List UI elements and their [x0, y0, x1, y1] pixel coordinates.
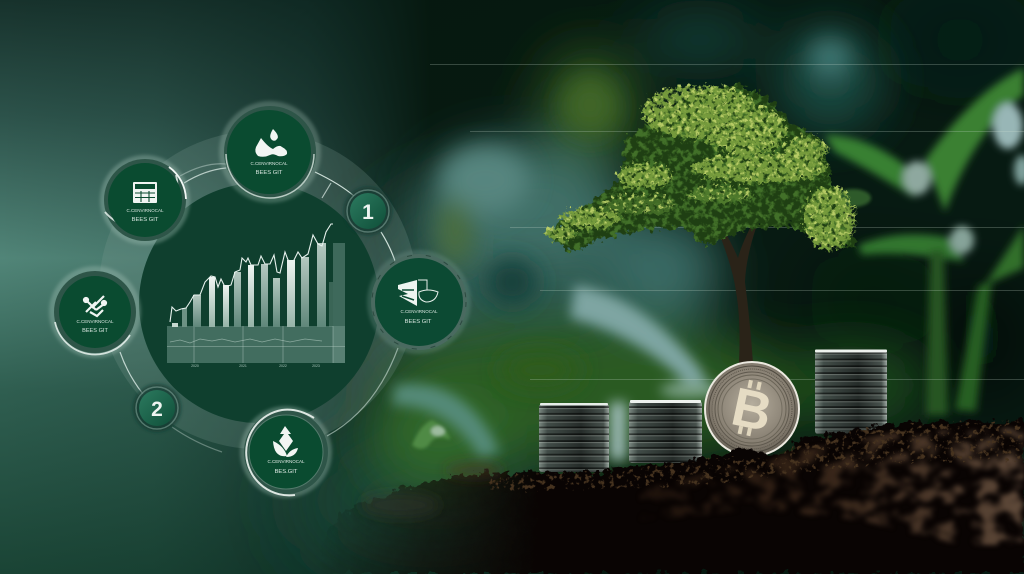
chart axis labels: 2022: [279, 364, 287, 368]
tree trunk: [717, 226, 756, 363]
soil: [300, 420, 1024, 574]
icon: sprout with diamond: [273, 426, 298, 457]
icon: shield and fish: [398, 280, 438, 306]
bar chart: [167, 224, 345, 368]
label: C.CENVIRNOCAL: [250, 161, 288, 166]
chart axis labels: [191, 364, 320, 368]
bitcoin coin: [705, 362, 799, 456]
tree canopy highlights: [547, 85, 856, 250]
node: top: BEES GIT: [256, 170, 283, 176]
tree canopy dark mass: [547, 84, 856, 253]
tree: [547, 84, 871, 363]
node: upper left: [100, 155, 190, 245]
chart trend line: [170, 224, 333, 322]
soil brown patches: [360, 462, 505, 517]
inner chart disc: [139, 183, 379, 423]
right coin stack: [815, 350, 887, 434]
circular diagram: [99, 131, 417, 452]
badge 2: [133, 384, 181, 432]
node: bottom: [240, 406, 332, 498]
chart table: [167, 243, 345, 363]
label: C.CENVIRNOCAL: [126, 208, 164, 213]
chart axis labels: 2021: [239, 364, 247, 368]
left coin stack: [539, 403, 609, 472]
middle coin stack: [629, 400, 702, 463]
label: C.CENVIRNOCAL: [400, 309, 438, 314]
faint side branch: [835, 189, 871, 207]
label: C.CENVIRNOCAL: [76, 319, 114, 324]
label: C.CENVIRNOCAL: [267, 459, 305, 464]
outer ring band: [99, 131, 417, 449]
soil brown mottling: [640, 428, 1024, 545]
horizontal light lines: [430, 64, 1024, 380]
icon: network diamond: [84, 296, 106, 316]
badge 2: 2: [151, 398, 163, 421]
icon: water drops: [255, 129, 287, 157]
soil body: [300, 420, 1024, 574]
chart axis labels: 2023: [312, 364, 320, 368]
node: right: [367, 250, 471, 354]
chart bars: [172, 243, 326, 327]
connector lines: [120, 164, 398, 452]
small sprout: [412, 420, 450, 449]
node: left: [49, 266, 141, 358]
badge 1: 1: [362, 201, 374, 224]
node: bottom: BES.GIT: [275, 469, 298, 475]
node: right: BEES GIT: [405, 319, 432, 325]
node: top: [219, 101, 321, 203]
node: upper left: BEES GIT: [132, 217, 159, 223]
soil crumbs: [490, 420, 1024, 492]
chart axis labels: 2020: [191, 364, 199, 368]
blurred foliage background: [300, 14, 1024, 570]
bitcoin symbol: B: [726, 377, 777, 443]
badge 1: [344, 187, 392, 235]
node: left: BEES GIT: [82, 328, 108, 334]
icon: calculator: [133, 182, 157, 203]
